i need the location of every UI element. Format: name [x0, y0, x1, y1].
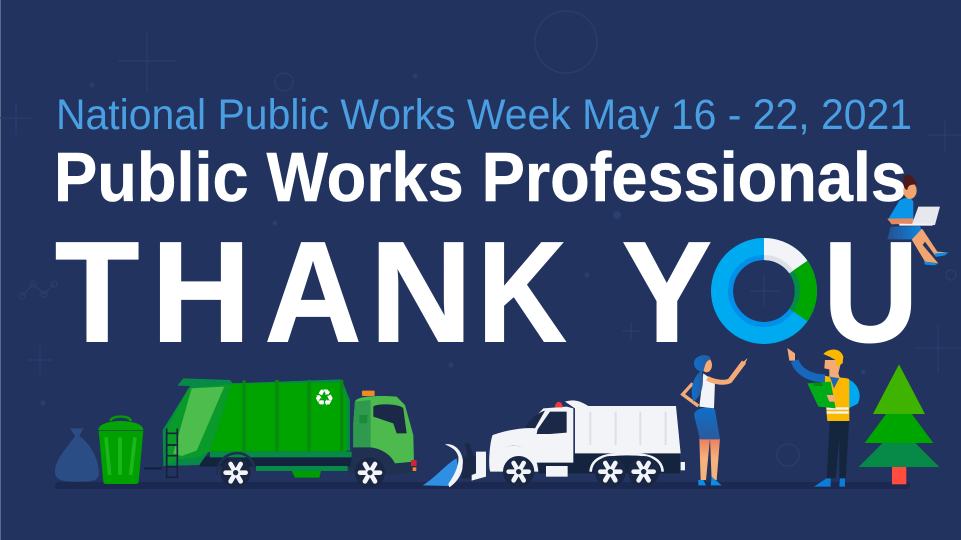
- icon: trash bin: [98, 416, 143, 484]
- figure: woman pointing: [683, 355, 748, 485]
- wheels: [503, 456, 659, 487]
- garbage bag, bin and garbage truck: [55, 378, 417, 488]
- ladder: [166, 428, 177, 478]
- snow pile: [423, 458, 459, 486]
- thank you text: [55, 212, 919, 372]
- people and tree: [683, 348, 939, 487]
- figure: woman with laptop sitting on U: [887, 175, 949, 265]
- wheels: [221, 458, 385, 488]
- plow blade: [445, 444, 463, 487]
- thank you text: Y: [622, 212, 712, 372]
- thank you text: A: [265, 213, 361, 372]
- thank you text: K: [478, 213, 566, 372]
- dump body: [538, 453, 680, 473]
- ground shadow: [55, 482, 910, 489]
- thank you text: H: [152, 212, 251, 372]
- donut chart as letter O: [722, 249, 806, 333]
- subtitle: National Public Works Week May 16 - 22, 2021: [56, 91, 912, 139]
- garbage truck: [144, 378, 417, 488]
- figure: worker with helmet: [787, 348, 860, 487]
- icon: garbage bag: [55, 428, 99, 482]
- thank you text: T: [55, 212, 139, 372]
- snow plow truck: [423, 400, 685, 487]
- cab: [525, 407, 573, 463]
- thank you text: U: [823, 213, 919, 372]
- heading: Public Works Professionals: [54, 138, 907, 216]
- truck cab: [349, 447, 417, 475]
- icon: recycle symbol: ♻: [314, 386, 334, 412]
- thank you text: N: [370, 213, 472, 372]
- icon: pine tree: [859, 364, 939, 484]
